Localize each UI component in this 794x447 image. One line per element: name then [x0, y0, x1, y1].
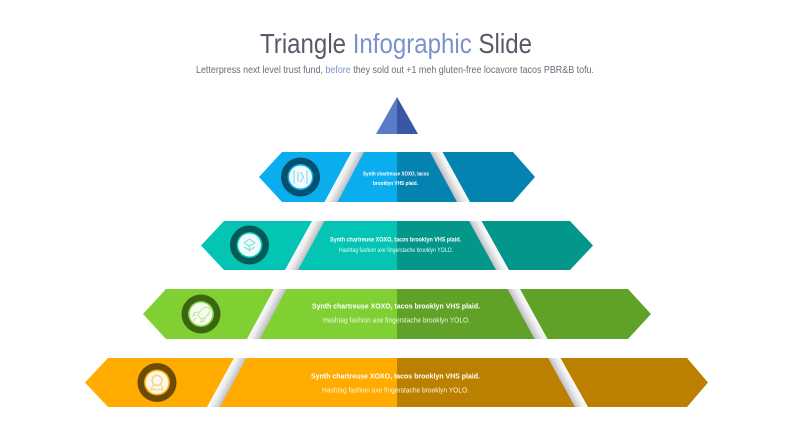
icon: tier 3 circle [182, 294, 220, 334]
text: tier 1: brooklyn VHS plaid. [373, 181, 418, 187]
text: tier 1: Synth chartreuse XOXO, tacos [363, 172, 429, 178]
icon: tier 1 circle [281, 158, 320, 196]
panel: tier 1 blue [259, 152, 535, 202]
text: tier 4 [311, 374, 480, 394]
text: tier 3 [312, 304, 480, 324]
icon: tier 2 circle [230, 226, 269, 264]
icon: tier 4 circle [138, 363, 176, 402]
subtitle: Letterpress next level trust fund, before they sold out +1 meh gluten-free locavore tacos PBR&B tofu. [196, 64, 594, 76]
text: tier 4: Hashtag fashion axe fingerstache brooklyn YOLO. [322, 386, 469, 394]
panel: tier 4 orange [85, 358, 708, 407]
text: tier 1 [363, 172, 429, 187]
text: tier 3: Synth chartreuse XOXO, tacos brooklyn VHS plaid. [312, 304, 480, 310]
panel: tier 3 green [143, 289, 651, 339]
text: tier 2: Hashtag fashion axe fingerstache brooklyn YOLO. [339, 248, 453, 254]
text: tier 2 [330, 236, 461, 254]
text: tier 4: Synth chartreuse XOXO, tacos brooklyn VHS plaid. [311, 374, 480, 380]
title: Triangle Infographic Slide [260, 28, 532, 59]
text: tier 3: Hashtag fashion axe fingerstache brooklyn YOLO. [323, 316, 470, 324]
text: tier 2: Synth chartreuse XOXO, tacos brooklyn VHS plaid. [330, 236, 461, 244]
panel: tier 2 teal [201, 221, 593, 270]
icon: pyramid top triangle [376, 97, 418, 134]
